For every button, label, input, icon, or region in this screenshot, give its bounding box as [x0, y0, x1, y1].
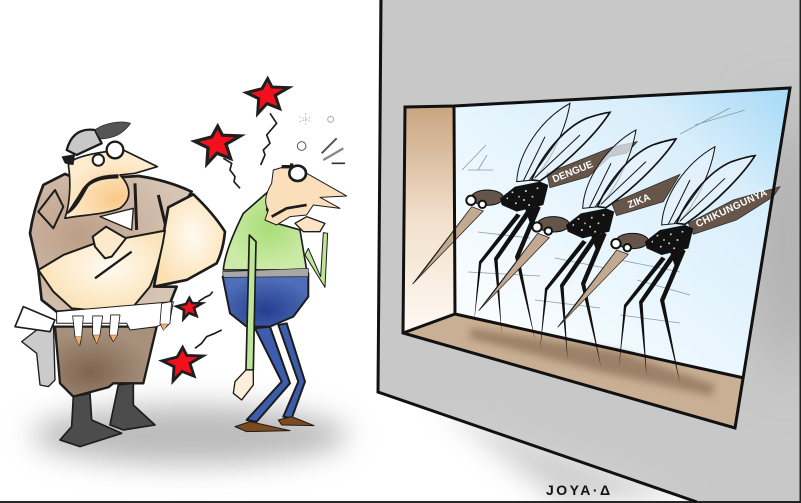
- glasses: [107, 142, 123, 158]
- head: [265, 167, 347, 225]
- star: middle: [195, 126, 240, 164]
- shirt: [30, 174, 192, 312]
- window floor: [403, 313, 744, 428]
- moustache: [66, 174, 118, 214]
- forearm crease: [95, 252, 132, 278]
- wall edge lines: [378, 0, 697, 502]
- stars: [162, 79, 289, 381]
- sky scratches: [462, 108, 745, 323]
- mosquito: dengue: DENGUE: [551, 159, 595, 185]
- legs: [247, 327, 290, 422]
- hanging hand: [233, 370, 253, 400]
- floor shadow: [470, 328, 715, 396]
- glasses and eye: [289, 166, 306, 181]
- window sky: [454, 88, 790, 378]
- signature: JOYA·Δ: [546, 482, 613, 498]
- cap dome: [67, 130, 102, 155]
- window display: [403, 88, 790, 428]
- mosquito: zika: [479, 130, 680, 367]
- collar gap: [100, 208, 133, 230]
- mosquito: dengue: [413, 103, 637, 340]
- star: top: [246, 79, 289, 114]
- sweater: [223, 190, 307, 270]
- trousers: [223, 273, 308, 327]
- belt: [57, 302, 173, 330]
- shoes: [235, 417, 314, 432]
- raised arm: [305, 233, 328, 287]
- shirt folds: [135, 183, 167, 230]
- forearm: [38, 231, 165, 312]
- mosquito: chikungunya: CHIKUNGUNYA: [694, 187, 769, 230]
- face: [62, 122, 157, 218]
- wall shading: [755, 110, 801, 370]
- mosquito: zika: ZIKA: [626, 192, 652, 211]
- hanging arm: [246, 235, 256, 370]
- shoulder strap: [38, 190, 63, 228]
- holster: [15, 307, 55, 332]
- window side wall: [403, 106, 455, 333]
- cap brim: [62, 154, 75, 165]
- gun: [22, 320, 55, 387]
- waistband: [223, 268, 308, 277]
- old man: [195, 113, 347, 432]
- pants: [55, 327, 157, 397]
- raised hand: [295, 217, 325, 232]
- police officer: [15, 122, 225, 447]
- fist: [93, 227, 126, 258]
- boots: [60, 383, 155, 447]
- ground shadow: [32, 405, 348, 465]
- mosquito: chikungunya: [558, 147, 780, 383]
- wall: [378, 0, 801, 503]
- upper arm: [154, 194, 225, 287]
- window frame: [403, 88, 790, 428]
- star: lower: [162, 347, 203, 381]
- dizzy marks: [297, 113, 345, 163]
- squiggles: [195, 113, 277, 348]
- bullets: [73, 302, 172, 345]
- cap visor: [95, 122, 131, 139]
- wall lower shadow: [440, 405, 690, 503]
- mouth: [272, 205, 307, 217]
- star: small: [177, 298, 202, 319]
